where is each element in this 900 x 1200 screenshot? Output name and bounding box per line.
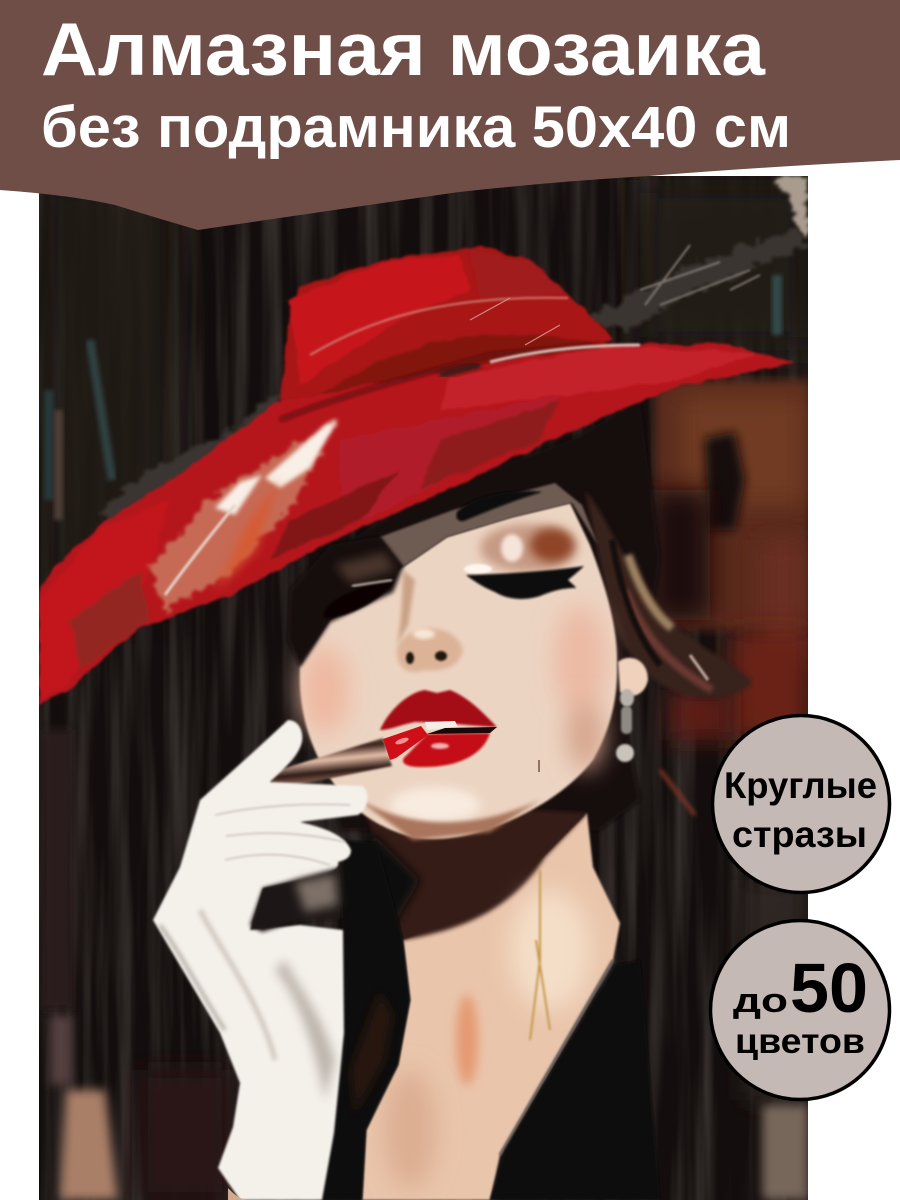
hair bbox=[585, 490, 752, 698]
lipstick bbox=[272, 726, 428, 790]
header banner bbox=[0, 0, 900, 230]
right eyelashes bbox=[466, 566, 584, 599]
badge: round rhinestones: Круглые bbox=[724, 765, 877, 806]
title: Алмазная мозаика bbox=[41, 7, 766, 91]
gray brush strokes upper right bbox=[585, 228, 805, 330]
badge: up to 50 colours bbox=[710, 920, 890, 1100]
face bbox=[288, 483, 617, 840]
hat brim bbox=[39, 343, 795, 705]
hat brim highlights bbox=[150, 420, 335, 610]
top right pale corner bbox=[772, 178, 808, 238]
right eye shadow bbox=[480, 524, 576, 572]
hat bbox=[39, 247, 795, 705]
lower background bbox=[745, 880, 808, 1100]
badge: up to 50 colours: цветов bbox=[735, 1022, 865, 1061]
lips bbox=[380, 690, 497, 767]
right eyebrow bbox=[456, 491, 542, 521]
badge: up to 50 colours: 50 bbox=[790, 949, 868, 1027]
painting background bbox=[39, 176, 810, 1200]
hat crown bbox=[278, 244, 614, 402]
lipstick bullet bbox=[383, 726, 428, 760]
ear bbox=[618, 658, 648, 696]
dark shadow around head bbox=[300, 400, 660, 830]
gray brow shade bbox=[380, 483, 598, 567]
rust patch bbox=[655, 380, 810, 630]
subtitle: без подрамника 50х40 см bbox=[41, 95, 791, 160]
left eyelashes bbox=[324, 582, 394, 618]
lipstick tube bbox=[272, 738, 392, 790]
left eye shadow bbox=[288, 537, 403, 667]
band bbox=[280, 345, 600, 420]
glove finger creases bbox=[215, 804, 350, 865]
earring bbox=[616, 689, 634, 762]
badge: up to 50 colours: до bbox=[733, 982, 788, 1020]
black dress bbox=[320, 840, 660, 1200]
glove shadow bbox=[250, 868, 342, 932]
nose bbox=[397, 570, 463, 672]
badge: round rhinestones: стразы bbox=[732, 814, 867, 855]
skin mark bbox=[538, 760, 540, 772]
neck and chest bbox=[360, 800, 620, 1200]
painting: woman in red hat bbox=[39, 176, 810, 1200]
lower left patches bbox=[42, 730, 72, 1010]
white glove bbox=[153, 720, 368, 1200]
dark smudge on hat edge bbox=[100, 395, 292, 522]
badge: round rhinestones bbox=[712, 716, 890, 892]
